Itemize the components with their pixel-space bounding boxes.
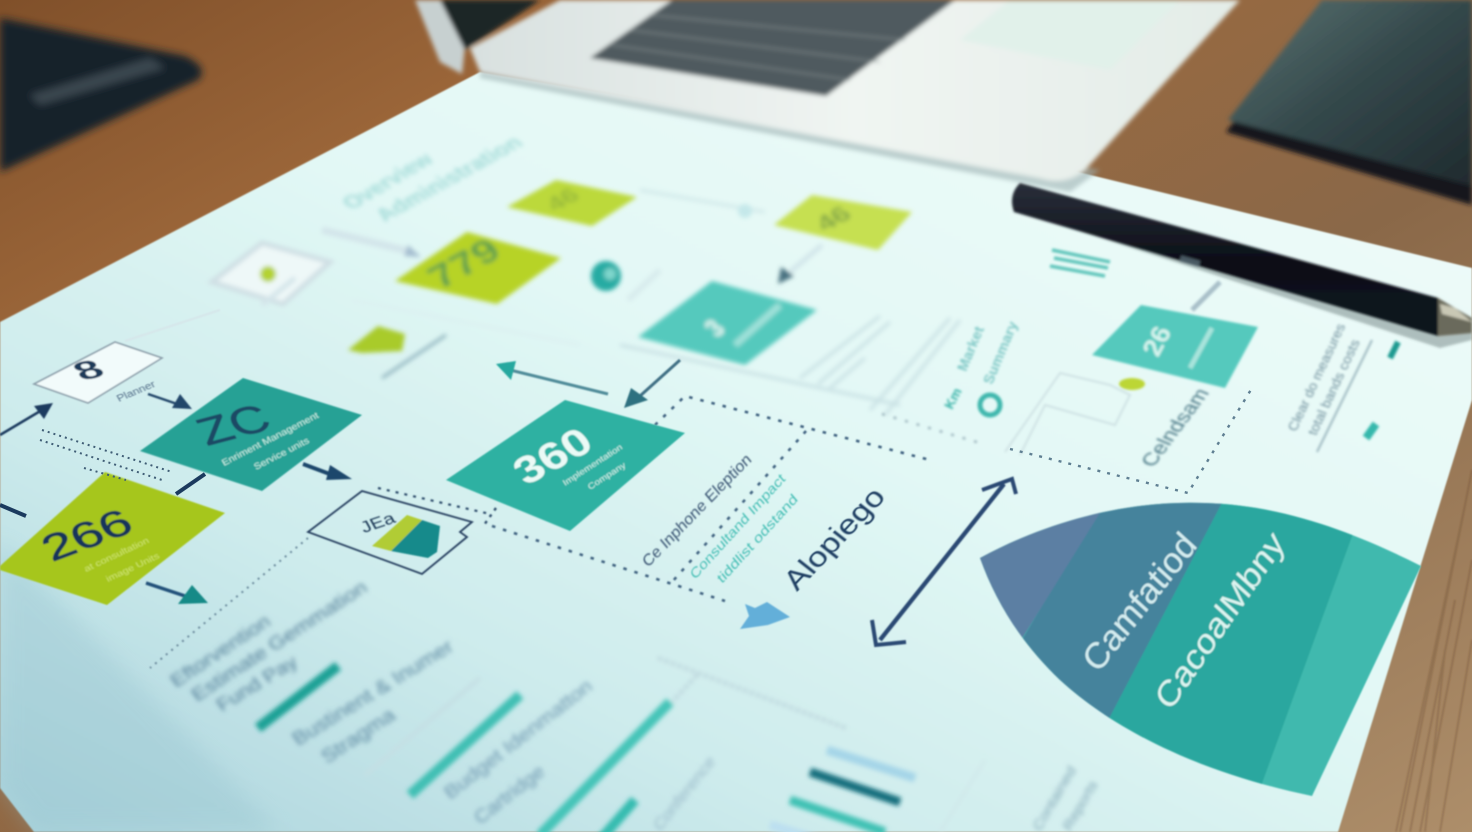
dashed line: badge to lower left [150, 538, 308, 668]
lime box: 266: at consultation [82, 536, 151, 574]
text block: centre right blurred: Market [955, 325, 988, 373]
arrow: 8 to ZC [148, 394, 192, 409]
text block: centre right blurred: Summary [981, 320, 1022, 386]
teal box: ZC: ZC [188, 395, 279, 454]
label: under box 8: Planner [115, 379, 158, 404]
smartphone [1226, 0, 1472, 205]
dashed panel: centre right [1010, 388, 1252, 493]
text block: lower left 2: Stragma [317, 704, 400, 768]
text block: lower left: Estimate Gemmation [188, 577, 371, 706]
bar: teal [410, 695, 520, 795]
inner small panel [1005, 373, 1130, 455]
teal box: 3 [638, 281, 817, 365]
box: 8: 8 [66, 354, 111, 386]
heading: top title: Overview [336, 149, 440, 213]
bars: multi colour legend [770, 750, 915, 832]
lime box: 779: 779 [420, 232, 509, 296]
lime box: 266 [0, 472, 225, 605]
arrow: dark arrow pointing down-left [624, 360, 680, 408]
connector: left stub [0, 505, 26, 516]
lime box: top right: 46 [810, 201, 857, 236]
text block: teal small labels: Consultand Impact [687, 470, 789, 583]
text block: centre right blurred [955, 320, 1022, 386]
arrow: lime box to lower [146, 583, 208, 604]
teal box: 360: 360 [505, 420, 601, 493]
lime box: 266: image Units [104, 552, 162, 584]
dark notebook, top left [0, 18, 202, 172]
arrow: ZC to badge [303, 464, 352, 480]
pie label: Camfatiod: Camfatiod [1075, 525, 1204, 679]
text: far lower right [1031, 764, 1101, 832]
icon: small lime heart [1119, 378, 1145, 390]
panel: blurred upper flow [212, 133, 960, 415]
pen [1012, 183, 1472, 348]
lime box: top left [507, 180, 637, 226]
pie band: blue teal [1022, 502, 1222, 718]
teal box: 3: 3 [699, 315, 731, 342]
pie band: slate blue [980, 513, 1100, 638]
bottom left paper shade [0, 540, 280, 832]
double arrow [872, 479, 1016, 645]
lime box: 266: 266 [33, 500, 141, 569]
teal dash upper [1390, 342, 1398, 358]
arrow: top left light [322, 230, 421, 257]
dashed notes: between 8 and lime box [40, 430, 172, 480]
connector: ZC to lime box [176, 474, 205, 494]
text block: lower left: Fund Pay [213, 652, 302, 716]
dashed panel: centre [492, 396, 930, 601]
text block: far right: Clear do measures [1285, 322, 1348, 433]
laptop [415, 0, 1240, 192]
label: Alopiego: Alopiego [777, 482, 892, 596]
text block: far right: total bands costs [1305, 337, 1363, 437]
label: Celndsam: Celndsam [1137, 385, 1214, 470]
text lines: right of teal box 3 [620, 316, 960, 415]
icon: teal disc [591, 261, 660, 300]
connector: top boxes [640, 190, 765, 218]
text block: lower left: Eftorvention [167, 611, 275, 692]
stripes: top right teal [1050, 250, 1110, 276]
arrow: down from lime box [778, 245, 822, 284]
panel: right column blurred [882, 250, 1398, 470]
teal box: 360 [446, 400, 685, 531]
teal box: ZC: Enriment Management [220, 411, 321, 468]
bar: tall teal [540, 702, 670, 832]
icon: light blue arrow [740, 602, 790, 629]
light note [365, 678, 480, 775]
teal box: 360: Implementation [561, 442, 624, 488]
text block: centre dark label: Ce Inphone Eleption [640, 451, 755, 571]
text block: lower centre: Cartridge [470, 761, 549, 829]
text block: lower centre: Budget Idenmatton [441, 676, 596, 804]
bar: short teal [600, 800, 635, 832]
pie band: teal [1109, 503, 1352, 784]
icon: teal ring: Km [941, 386, 965, 411]
teal box: 26: 26 [1136, 322, 1177, 360]
pie chart [979, 502, 1422, 797]
heading: top title: Administration [369, 133, 529, 225]
badge: JEa icon [308, 488, 496, 574]
text block: far right [1285, 322, 1372, 452]
badge: JEa icon: JEa [357, 508, 399, 536]
dashed line: right panel left edge [882, 414, 980, 443]
panel: lower blurred bars [167, 577, 1101, 832]
arrow: teal arrow pointing left [496, 361, 608, 394]
connector: pen to box [1192, 282, 1220, 310]
teal box: ZC [140, 378, 362, 491]
teal dash mark [1366, 424, 1376, 438]
lime box: 779 [395, 232, 561, 304]
teal box: 26 [1092, 305, 1258, 388]
dashed rule [658, 658, 846, 728]
teal box: ZC: Service units [252, 436, 311, 472]
icon: lime pentagon [348, 300, 580, 378]
icon: teal ring [941, 386, 1000, 415]
box: 8 [34, 310, 220, 403]
lime box: top right [774, 195, 912, 250]
text block: teal small labels: tiddlist odstand [715, 491, 801, 587]
bar: dark teal [258, 666, 338, 728]
lime box: top left: 46 [542, 184, 585, 216]
teal box: 360: Company [586, 460, 628, 492]
arrow: left up to box 8 [0, 403, 53, 435]
pie label: CacoalMbny: CacoalMbny [1148, 524, 1292, 717]
text block: lower left 2: Bustinent & Inumer [288, 636, 458, 750]
icon: small outlined box [212, 243, 330, 305]
